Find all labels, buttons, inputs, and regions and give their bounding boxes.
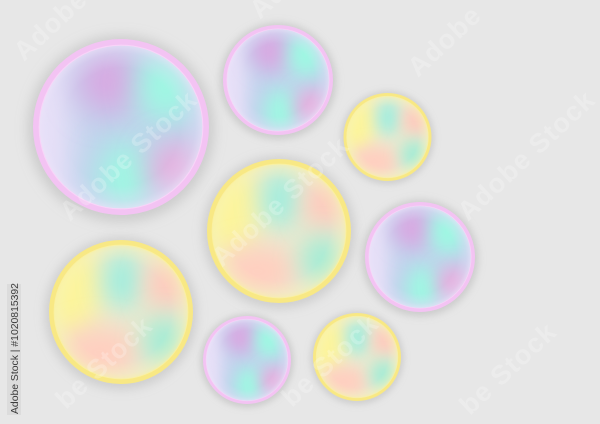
pink circle large <box>21 35 214 222</box>
watermarks: Adobe Stock <box>206 130 355 272</box>
yellow circle lower left <box>40 237 197 390</box>
stock id strip <box>7 284 21 415</box>
watermarks: be Stock <box>50 310 158 414</box>
pink circle bottom <box>197 314 294 408</box>
yellow circle top right <box>338 91 434 185</box>
yellow circle bottom <box>308 311 404 405</box>
watermarks: be Stock <box>454 316 562 420</box>
pink circle top <box>215 23 336 139</box>
stock id label: Adobe Stock | #1020815392 <box>10 283 21 414</box>
watermarks: Adobe <box>402 0 487 82</box>
pink circle right <box>357 200 478 316</box>
watermarks: Adobe Stock <box>54 84 203 226</box>
watermarks: Adobe Stock <box>452 84 600 226</box>
watermarks: be Stock <box>276 308 384 412</box>
yellow circle centre <box>198 156 355 309</box>
